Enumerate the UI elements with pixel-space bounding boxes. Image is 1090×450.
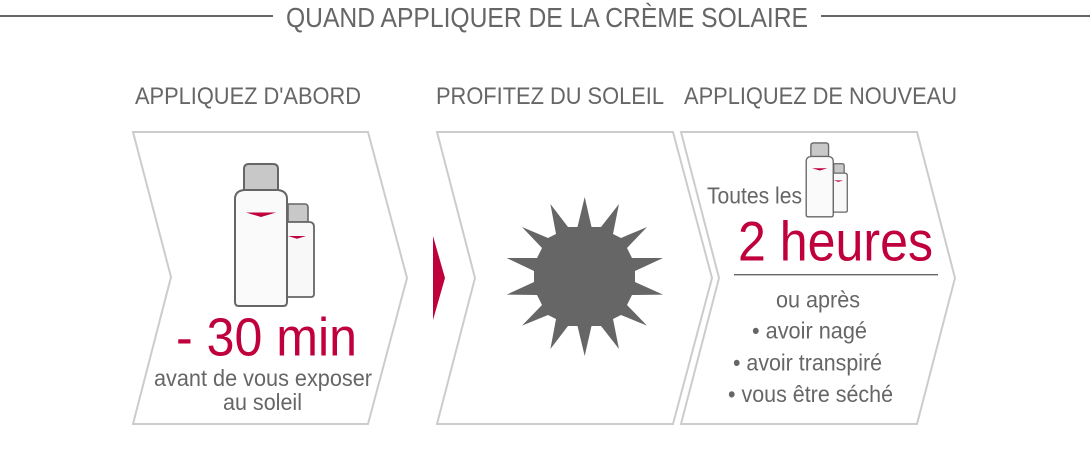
value: minus 30 min: - 30 min [176, 308, 357, 368]
text: before exposure [154, 365, 372, 415]
arrow: red [433, 236, 445, 320]
text: or after list: ou après [776, 286, 860, 312]
text: or after list: • vous être séché [728, 381, 893, 407]
text: or after list: • avoir nagé [752, 318, 867, 344]
title with side rules: QUAND APPLIQUER DE LA CRÈME SOLAIRE [286, 2, 808, 33]
text: before exposure: avant de vous exposer [154, 365, 372, 391]
icon: sun [507, 197, 663, 356]
heading: appliquez de nouveau: APPLIQUEZ DE NOUVEAU [684, 83, 957, 110]
text: every: Toutes les [707, 182, 802, 208]
panel: apply first [133, 132, 407, 424]
panel: enjoy the sun [437, 132, 712, 424]
icon: small bottles [806, 143, 847, 217]
text: before exposure: au soleil [223, 389, 302, 415]
heading: profitez du soleil: PROFITEZ DU SOLEIL [436, 83, 664, 110]
heading: appliquez d'abord: APPLIQUEZ D'ABORD [135, 83, 361, 110]
value: 2 hours: 2 heures [738, 210, 933, 272]
text: or after list [728, 286, 893, 407]
panel: reapply [681, 132, 955, 424]
text: or after list: • avoir transpiré [733, 350, 882, 376]
icon: large and small bottles [235, 164, 314, 306]
